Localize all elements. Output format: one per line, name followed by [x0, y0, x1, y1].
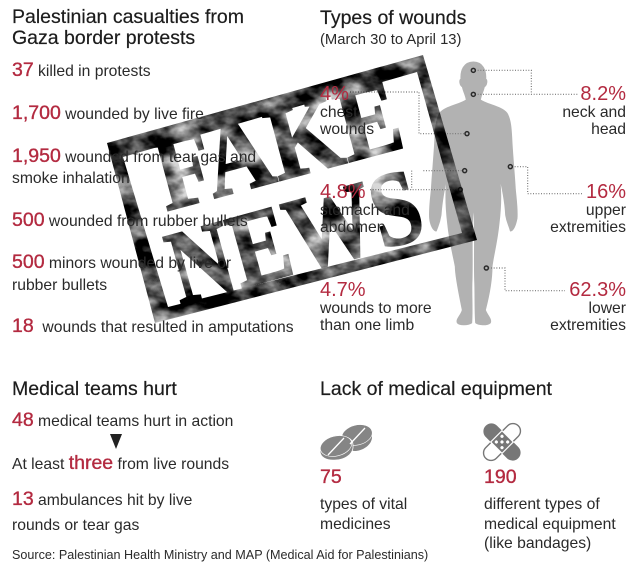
label: upper extremities: [550, 181, 626, 236]
heading: casualties: [12, 6, 244, 49]
stat: amputations: 18 wounds that resulted in amputations: [12, 315, 294, 337]
label: chest: wounds: [320, 121, 374, 138]
panel: types of wounds right labels: [550, 83, 626, 334]
label: upper extremities: 16%: [586, 181, 626, 203]
heading: types of wounds: Types of wounds: [320, 7, 466, 29]
label: stomach: abdomen: [320, 219, 385, 236]
FAKE NEWS stamp: FAKE: [142, 55, 413, 233]
stat: ambulances: rounds or tear gas: [12, 516, 139, 534]
text: equipment: [484, 496, 616, 552]
label: neck and head: [562, 83, 626, 138]
label: lower extremities: 62.3%: [569, 279, 626, 301]
label: lower extremities: [550, 279, 626, 334]
stat: killed: 37 killed in protests: [12, 59, 151, 81]
heading: casualties: Palestinian casualties from: [12, 6, 244, 28]
label: limb: wounds to more: [320, 300, 432, 317]
human body figure with markers: [350, 62, 582, 326]
label: lower extremities: lower: [588, 300, 626, 317]
panel: Palestinian casualties: [12, 6, 294, 337]
label: neck and head: 8.2%: [580, 83, 626, 105]
stat: tear gas: smoke inhalation: [12, 170, 130, 187]
heading: medical teams: Medical teams hurt: [12, 378, 177, 400]
panel: medical teams hurt: [12, 378, 233, 534]
stat: equipment count: 190: [484, 466, 517, 488]
label: chest: [320, 83, 374, 138]
subheading: dates: (March 30 to April 13): [320, 32, 461, 48]
icon: pills: [320, 424, 372, 460]
text: medicines: medicines: [320, 516, 391, 532]
stat: tear gas: 1,950 wounded from tear gas and: [12, 145, 256, 167]
stat: teams hurt: 48 medical teams hurt in action: [12, 409, 233, 431]
heading: equipment: Lack of medical equipment: [320, 378, 552, 400]
label: upper extremities: upper: [586, 202, 626, 219]
label: limb: than one limb: [320, 317, 414, 334]
stat: live rounds: At least three from live rounds: [12, 452, 229, 474]
label: neck and head: head: [591, 121, 626, 138]
label: lower extremities: extremities: [550, 317, 626, 334]
label: stomach: 4.8%: [320, 181, 366, 203]
text: equipment: (like bandages): [484, 535, 591, 552]
stat: medicines count: 75: [320, 466, 342, 488]
label: stomach: [320, 181, 410, 236]
label: limb: [320, 279, 432, 334]
label: stomach: stomach and: [320, 202, 410, 219]
stat: minors: 500 minors wounded by live or: [12, 251, 231, 273]
panel: types of wounds left labels: [320, 7, 466, 334]
stat: minors: rubber bullets: [12, 277, 107, 294]
stat: tear gas: [12, 145, 256, 187]
source note: Source: Palestinian Health Ministry and MAP (Medical Aid for Palestinians): [12, 548, 428, 562]
label: neck and head: neck and: [562, 104, 626, 121]
label: chest: chest: [320, 104, 358, 121]
FAKE NEWS stamp: NEWS: [155, 145, 435, 327]
stat: live fire: 1,700 wounded by live fire: [12, 102, 204, 124]
text: medicines: types of vital: [320, 496, 407, 513]
text: equipment: different types of: [484, 496, 600, 513]
icon: down arrow: [110, 434, 122, 449]
label: chest: 4%: [320, 83, 349, 105]
stat: rubber bullets: 500 wounded from rubber bullets: [12, 209, 248, 231]
panel: lack of medical equipment: [320, 378, 616, 552]
stat: ambulances: [12, 488, 192, 534]
label: limb: 4.7%: [320, 279, 366, 301]
icon: bandage: [482, 422, 522, 462]
label: upper extremities: extremities: [550, 219, 626, 236]
heading: casualties: Gaza border protests: [12, 27, 195, 49]
text: equipment: medical equipment: [484, 516, 616, 532]
text: medicines: [320, 496, 407, 532]
stat: minors: [12, 251, 231, 294]
stat: ambulances: 13 ambulances hit by live: [12, 488, 192, 510]
